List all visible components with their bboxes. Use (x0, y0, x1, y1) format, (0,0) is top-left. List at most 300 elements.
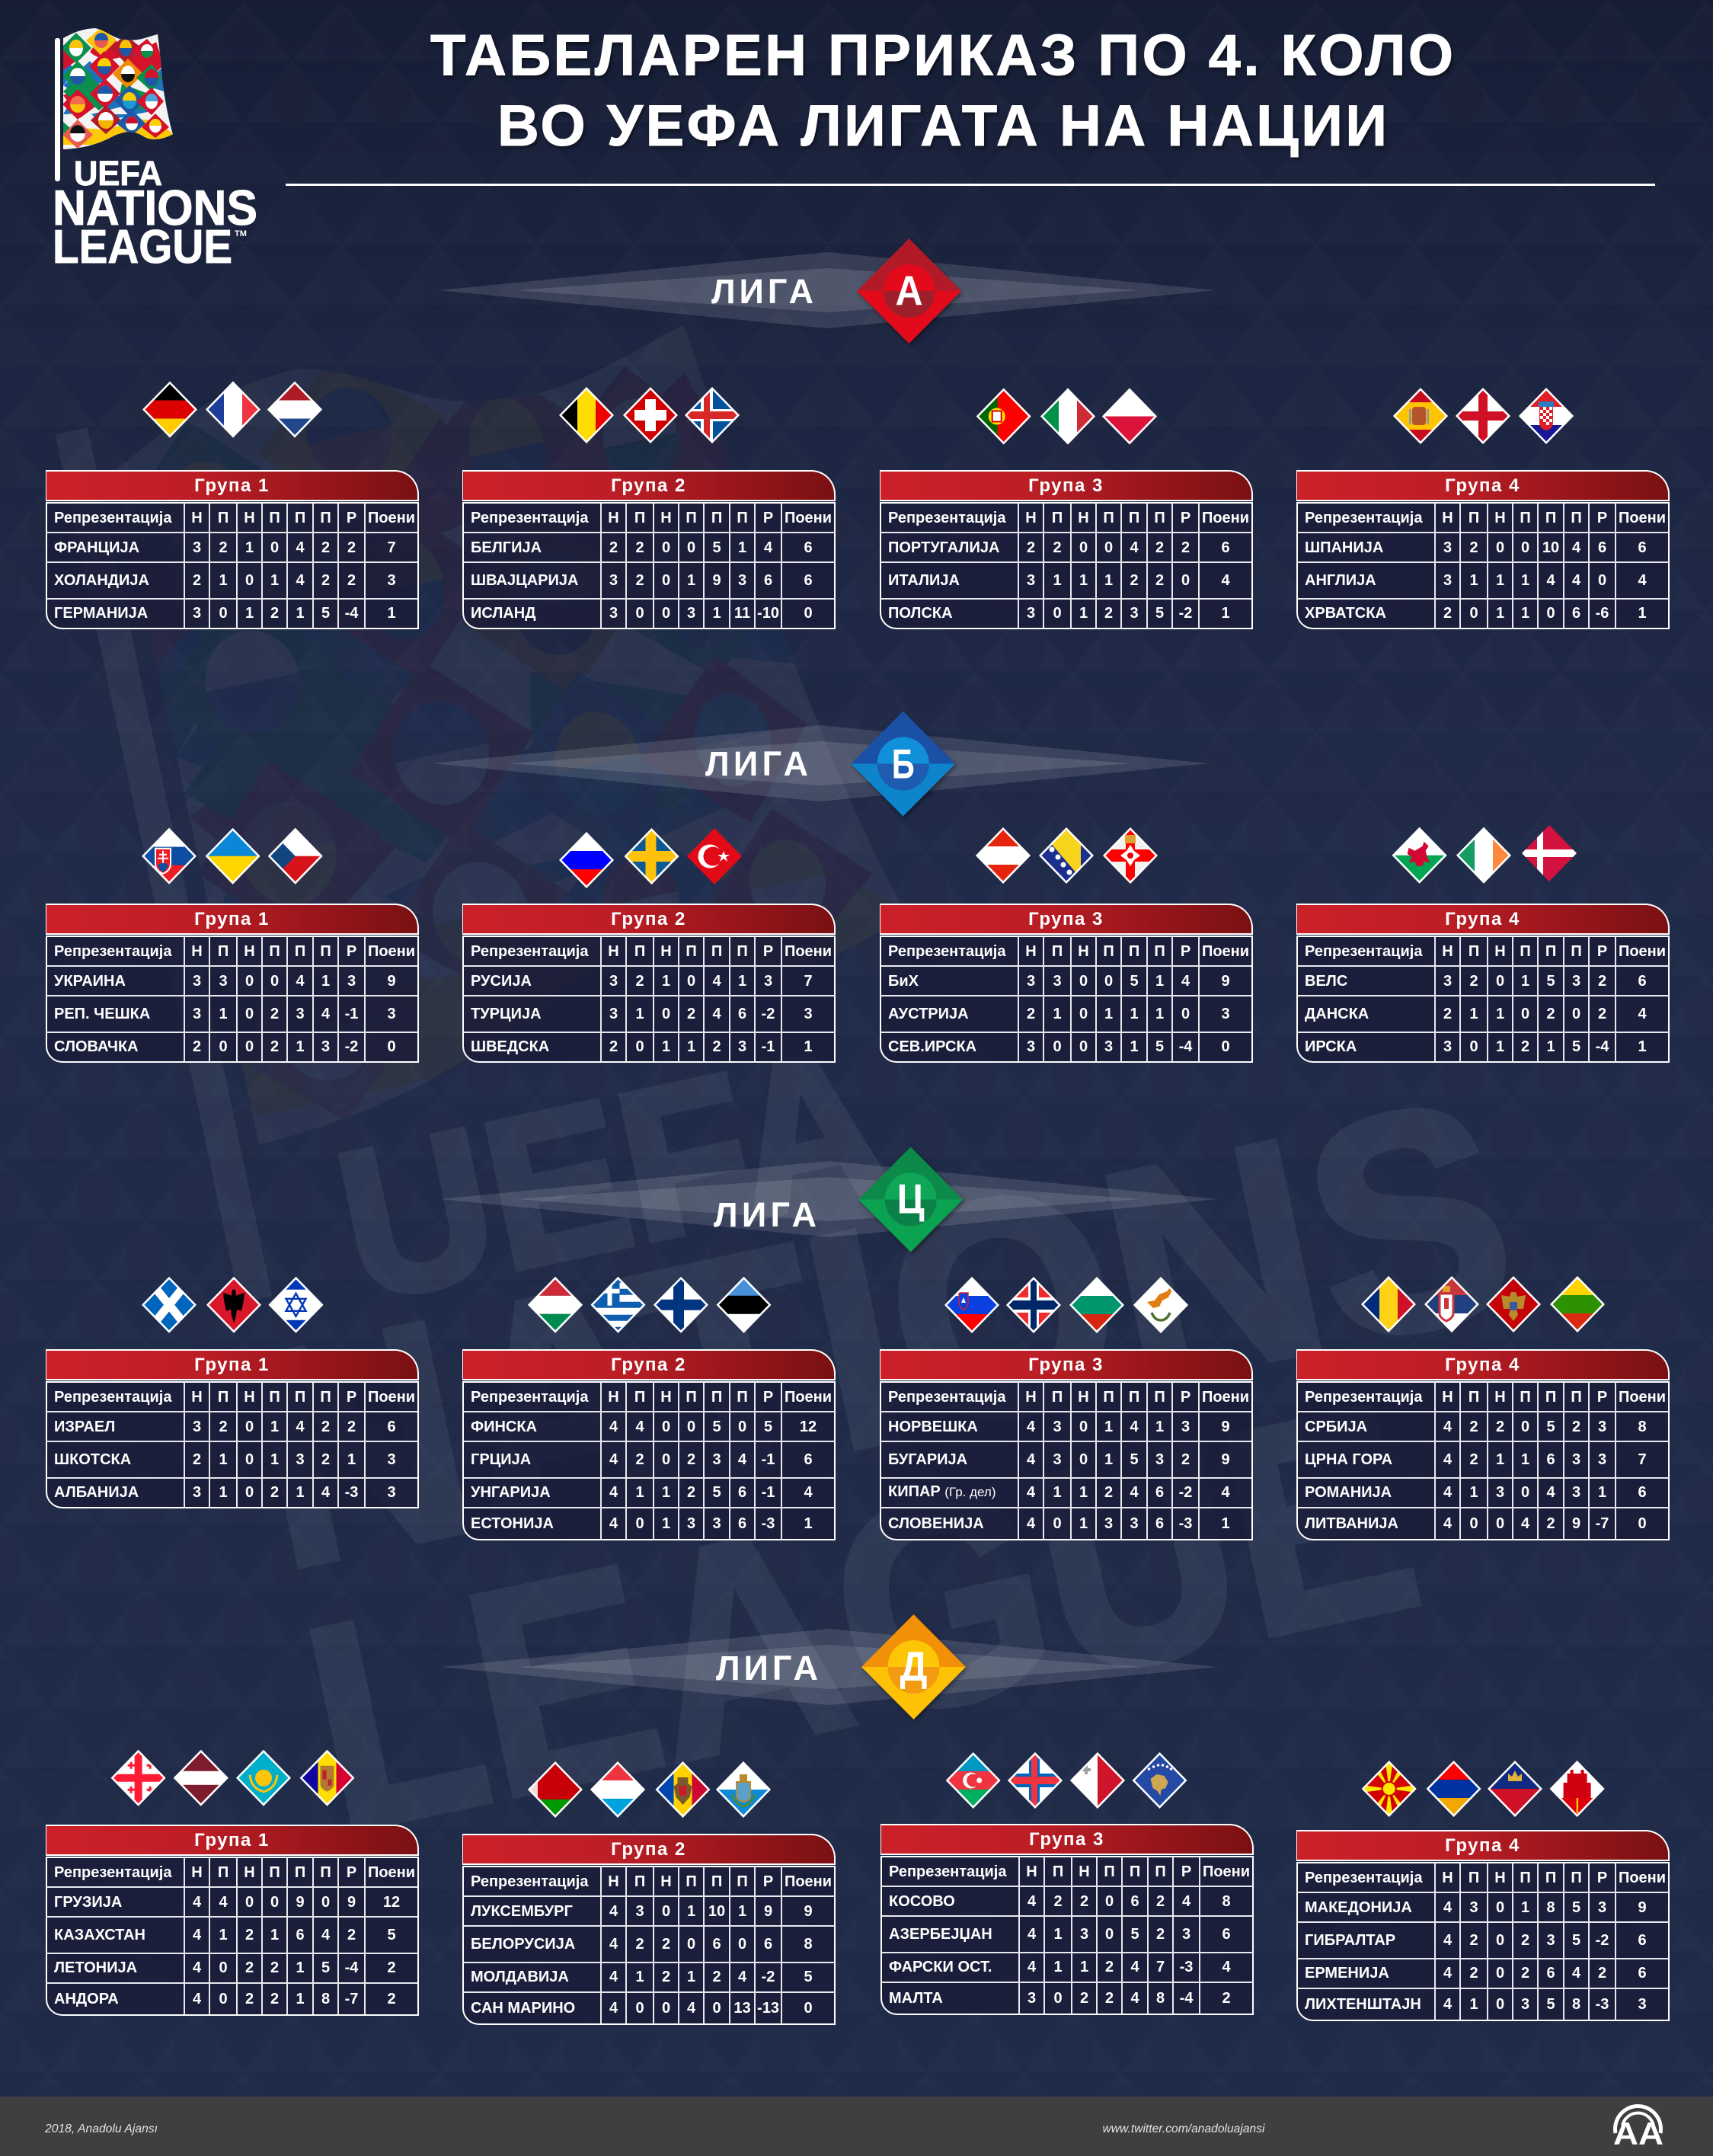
standings table: Поени (785, 943, 832, 960)
standings table: 4 (1130, 539, 1139, 556)
standings table: 0 (635, 2000, 644, 2017)
standings table: ЛУКСЕМБУРГ (471, 1903, 573, 1920)
standings table: 0 (635, 1515, 644, 1532)
group heading: Група 1 (194, 475, 270, 496)
group heading: Група 4 (1445, 1355, 1520, 1375)
standings table: 1 (662, 1484, 670, 1501)
standings table: 2 (1080, 1990, 1088, 2007)
standings table: 0 (1496, 1996, 1504, 2013)
standings table: 2 (1053, 539, 1062, 556)
standings table: 3 (219, 972, 228, 989)
standings table: ШВЕДСКА (471, 1038, 549, 1054)
standings table: 5 (1155, 605, 1164, 622)
standings table: ЦРНА ГОРА (1305, 1451, 1392, 1468)
standings table: 0 (1496, 1515, 1504, 1532)
standings table: Р (347, 1388, 356, 1405)
standings table: -4 (1179, 1038, 1192, 1054)
standings table (462, 936, 836, 1063)
standings table: 1 (270, 1927, 279, 1943)
standings table: 4 (1443, 1996, 1452, 2013)
standings table: 3 (387, 572, 396, 589)
flag: Romania (1361, 1276, 1416, 1332)
standings table: 4 (738, 1451, 746, 1468)
panel: league A group 3 (880, 470, 1253, 629)
group heading: Група 2 (611, 1355, 686, 1375)
standings table: Р (1597, 509, 1607, 526)
group heading: Група 2 (611, 909, 686, 929)
standings table: 1 (347, 1451, 356, 1468)
standings table: Н (244, 1388, 255, 1405)
standings table: 1 (1598, 1484, 1606, 1501)
standings table: ЕРМЕНИЈА (1305, 1964, 1389, 1981)
standings table: Н (1442, 943, 1453, 960)
standings table: П (634, 1388, 645, 1405)
standings table: 0 (270, 1894, 279, 1911)
standings table: 2 (387, 1991, 396, 2007)
standings table: 8 (1222, 1892, 1231, 1909)
title (430, 23, 1453, 158)
standings table: П (1520, 1870, 1531, 1886)
standings table: 4 (1130, 1484, 1139, 1501)
standings table: -1 (345, 1006, 358, 1022)
standings table: КИПАР (Гр. дел) (888, 1483, 996, 1500)
flag: Iceland (685, 387, 740, 443)
standings table: 2 (1443, 605, 1452, 622)
standings table: П (711, 1388, 722, 1405)
standings table: П (1053, 1863, 1063, 1880)
standings table: 1 (1496, 1038, 1504, 1054)
standings table: 2 (1443, 1006, 1452, 1022)
standings table (46, 502, 419, 629)
standings table: П (320, 1388, 331, 1405)
standings table: Поени (368, 1863, 415, 1880)
standings table: 4 (712, 972, 721, 989)
standings table: П (1154, 509, 1165, 526)
standings table: 0 (245, 1038, 254, 1054)
standings table: Н (244, 1863, 255, 1880)
standings table: 6 (1638, 1484, 1647, 1501)
standings table: 2 (1156, 1926, 1165, 1943)
standings table: 2 (635, 572, 644, 589)
standings table: 2 (1155, 539, 1164, 556)
standings table: Репрезентација (1305, 943, 1422, 960)
flag: Gibraltar (1550, 1761, 1605, 1817)
standings table (1296, 1381, 1670, 1540)
standings table: 3 (193, 1484, 201, 1501)
standings table: 4 (1443, 1898, 1452, 1915)
group heading: Група 4 (1445, 1835, 1520, 1856)
standings table: 4 (609, 2000, 618, 2017)
standings table: Р (347, 509, 356, 526)
standings table: 9 (1572, 1515, 1580, 1532)
standings table: 11 (734, 605, 750, 622)
flag: Switzerland (623, 387, 678, 443)
standings table: 9 (1221, 1419, 1230, 1435)
standings table: 0 (687, 972, 695, 989)
standings table: САН МАРИНО (471, 2000, 575, 2017)
standings table: 4 (1027, 1926, 1036, 1943)
standings table: 0 (1521, 1484, 1529, 1501)
flag: England (1456, 388, 1510, 444)
standings table: Поени (1619, 1870, 1666, 1886)
standings table: 1 (1079, 605, 1088, 622)
standings table: 1 (1521, 1451, 1529, 1468)
standings table: 0 (1496, 972, 1504, 989)
flag: Bulgaria (1069, 1277, 1124, 1333)
standings table: Н (1494, 943, 1506, 960)
standings table: 0 (245, 972, 254, 989)
standings table: 3 (387, 1451, 396, 1468)
standings table: 4 (321, 1484, 330, 1501)
standings table: 3 (1027, 1990, 1036, 2007)
standings table: БЕЛОРУСИЈА (471, 1936, 575, 1953)
standings table: Н (1026, 1863, 1037, 1880)
standings table: ШКОТСКА (54, 1451, 131, 1468)
standings table: 3 (1053, 1451, 1062, 1468)
standings table: Репрезентација (1305, 1870, 1422, 1886)
standings table: Поени (1619, 509, 1666, 526)
standings table: 9 (347, 1894, 356, 1911)
flag: France (206, 381, 260, 437)
standings table: 4 (609, 1484, 618, 1501)
flag: Moldova (655, 1761, 710, 1818)
group heading: Група 1 (194, 1355, 270, 1375)
standings table: 1 (687, 1903, 695, 1920)
standings table: Н (660, 1388, 672, 1405)
standings table: 4 (296, 539, 305, 556)
flag: Albania (206, 1277, 261, 1333)
standings table: 2 (1546, 1515, 1555, 1532)
standings table: 2 (687, 1006, 695, 1022)
group heading (462, 470, 836, 501)
standings table: 4 (1443, 1451, 1452, 1468)
standings table: Репрезентација (1305, 509, 1422, 526)
flag: Liechtenstein (1488, 1761, 1542, 1817)
standings table: 4 (193, 1959, 201, 1976)
standings table: 2 (321, 1419, 330, 1435)
standings table: П (1571, 943, 1582, 960)
standings table: 5 (1572, 1932, 1580, 1949)
standings table: 6 (1546, 1964, 1555, 1981)
standings table: 3 (387, 1006, 396, 1022)
standings table: 1 (296, 1959, 305, 1976)
standings table: 8 (1572, 1996, 1580, 2013)
standings table: 2 (347, 572, 356, 589)
standings table: 0 (1079, 1006, 1088, 1022)
standings table: 2 (347, 1927, 356, 1943)
flag: Germany (142, 381, 197, 437)
standings table: 2 (321, 539, 330, 556)
standings table: П (218, 509, 229, 526)
standings table: БиХ (888, 972, 919, 989)
standings table: 0 (635, 605, 644, 622)
standings table: Н (244, 509, 255, 526)
standings table: 5 (1130, 972, 1139, 989)
standings table: 2 (270, 1959, 279, 1976)
group heading (1296, 904, 1670, 935)
standings table: 2 (270, 1006, 279, 1022)
group heading: Група 2 (611, 475, 686, 496)
standings table: 3 (609, 605, 618, 622)
footer link: www.twitter.com/anadoluajansi (1103, 2122, 1265, 2135)
standings table: ШПАНИЈА (1305, 539, 1383, 556)
group heading: Група 1 (194, 1830, 270, 1851)
standings table: 3 (1598, 1451, 1606, 1468)
standings table: МАЛТА (889, 1990, 943, 2007)
standings table: 12 (383, 1894, 400, 1911)
standings table: 2 (662, 1936, 670, 1953)
standings table: 8 (1546, 1898, 1555, 1915)
standings table: 3 (1130, 1515, 1139, 1532)
standings table: 3 (609, 972, 618, 989)
standings table: 1 (1521, 1898, 1529, 1915)
panel: league D group 4 (1296, 1830, 1670, 2021)
standings table: Р (1597, 943, 1607, 960)
standings table: 2 (1027, 1006, 1035, 1022)
standings table: 9 (1221, 972, 1230, 989)
standings table: -1 (762, 1484, 775, 1501)
standings table: П (686, 1388, 697, 1405)
standings table: ЛИТВАНИЈА (1305, 1515, 1398, 1532)
standings table: 2 (712, 1038, 721, 1054)
standings table: 0 (1104, 539, 1113, 556)
panel: league B group 2 (462, 904, 836, 1063)
standings table: П (1545, 943, 1556, 960)
standings table: УНГАРИЈА (471, 1484, 551, 1501)
standings table: 2 (1027, 539, 1035, 556)
standings table: 1 (712, 605, 721, 622)
flag: Belarus (528, 1761, 583, 1818)
standings table: 0 (1521, 1006, 1529, 1022)
standings table: П (737, 509, 748, 526)
standings table: 2 (1521, 1932, 1529, 1949)
standings table: Р (347, 943, 356, 960)
standings table: 0 (1104, 972, 1113, 989)
standings table: 6 (1155, 1484, 1164, 1501)
standings table: -3 (1180, 1958, 1193, 1975)
standings table: 0 (662, 1451, 670, 1468)
standings table: 4 (1572, 572, 1580, 589)
standings table: ЕСТОНИЈА (471, 1515, 554, 1532)
standings table: Репрезентација (889, 1863, 1006, 1880)
standings table: 2 (1181, 1451, 1190, 1468)
standings table: 4 (1443, 1515, 1452, 1532)
standings table: 2 (270, 1484, 279, 1501)
standings table: -1 (762, 1038, 775, 1054)
standings table: 4 (609, 1969, 618, 1985)
standings table: 0 (245, 1451, 254, 1468)
standings table: 0 (687, 1419, 695, 1435)
standings table: ДАНСКА (1305, 1006, 1369, 1022)
standings table: П (1130, 1863, 1140, 1880)
standings table: 3 (1638, 1996, 1647, 2013)
standings table: ФИНСКА (471, 1419, 537, 1435)
standings table: 0 (1521, 539, 1529, 556)
standings table: 1 (1521, 972, 1529, 989)
flag: Netherlands (267, 381, 322, 437)
standings table: 0 (245, 1419, 254, 1435)
standings table: 2 (1105, 1990, 1114, 2007)
group heading: Група 2 (611, 1839, 686, 1860)
standings table: 3 (1521, 1996, 1529, 2013)
panel: league A group 1 (46, 470, 419, 629)
standings table: 6 (738, 1006, 746, 1022)
standings table: 5 (321, 1959, 330, 1976)
standings table: УКРАИНА (54, 972, 126, 989)
standings table: Н (1025, 943, 1037, 960)
standings table: Н (1442, 509, 1453, 526)
panel: league C group 3 (880, 1349, 1253, 1540)
standings table: 2 (193, 572, 201, 589)
standings table: 0 (1079, 1451, 1088, 1468)
standings table: 0 (270, 539, 279, 556)
flag: Azerbaijan (946, 1752, 1001, 1809)
standings table: П (295, 509, 305, 526)
standings table: 3 (738, 572, 746, 589)
standings table: 0 (1221, 1038, 1230, 1054)
standings table: МАКЕДОНИЈА (1305, 1898, 1412, 1915)
group heading (1296, 470, 1670, 501)
standings table: П (1469, 1870, 1479, 1886)
standings table: 4 (1443, 1932, 1452, 1949)
standings table: -3 (345, 1484, 358, 1501)
standings table: П (218, 1863, 229, 1880)
flag: Bosnia and Herzegovina (1037, 827, 1094, 884)
standings table: П (634, 943, 645, 960)
standings table: П (295, 943, 305, 960)
standings table: 3 (1104, 1515, 1113, 1532)
standings table: 0 (1496, 1964, 1504, 1981)
standings table: 4 (1546, 572, 1555, 589)
standings table: Поени (1203, 1863, 1250, 1880)
panel: league B group 3 (880, 904, 1253, 1063)
standings table: СЛОВАЧКА (54, 1038, 139, 1054)
standings table: ПОЛСКА (888, 605, 953, 622)
standings table: 0 (738, 1936, 746, 1953)
standings table: Репрезентација (1305, 1388, 1422, 1405)
standings table: -2 (1179, 605, 1192, 622)
standings table: 3 (347, 972, 356, 989)
standings table: ПОРТУГАЛИЈА (888, 539, 999, 556)
flag: Northern Ireland (1103, 827, 1158, 884)
group heading: Група 3 (1028, 475, 1104, 496)
standings table: П (320, 943, 331, 960)
standings table: 1 (1053, 572, 1062, 589)
standings table: 4 (1027, 1419, 1035, 1435)
title: ВО УЕФА ЛИГАТА НА НАЦИИ (497, 94, 1387, 158)
standings table: 3 (1053, 972, 1062, 989)
standings table: П (1520, 509, 1531, 526)
standings table: 2 (1130, 572, 1139, 589)
standings table: 2 (219, 1419, 228, 1435)
standings table: 1 (296, 1484, 305, 1501)
standings table: П (1129, 509, 1139, 526)
standings table (462, 1866, 836, 2025)
standings table: 0 (387, 1038, 396, 1054)
standings table: 2 (1080, 1892, 1088, 1909)
standings table: 1 (1104, 1451, 1113, 1468)
standings table: Н (191, 943, 203, 960)
standings table: 4 (609, 1903, 618, 1920)
flag: San Marino (716, 1761, 771, 1818)
standings table: -6 (1596, 605, 1609, 622)
standings table: 2 (387, 1959, 396, 1976)
standings table: Репрезентација (471, 1873, 588, 1889)
standings table: 6 (1130, 1892, 1139, 1909)
standings table: 2 (193, 1038, 201, 1054)
standings table: 4 (1221, 1484, 1230, 1501)
standings table: 3 (1572, 972, 1580, 989)
standings table: -2 (762, 1006, 775, 1022)
standings table: 1 (245, 605, 254, 622)
standings table: 2 (1469, 1964, 1478, 1981)
standings table: Р (1181, 1388, 1190, 1405)
standings table: 0 (219, 1038, 228, 1054)
standings table: П (737, 1388, 748, 1405)
standings table: ГРУЗИЈА (54, 1894, 122, 1911)
standings table: 3 (1080, 1926, 1088, 1943)
panel: league A group 4 (1296, 470, 1670, 629)
standings table: 6 (1222, 1926, 1231, 1943)
standings table: 0 (245, 572, 254, 589)
standings table: 3 (1027, 1038, 1035, 1054)
standings table: 4 (1443, 1419, 1452, 1435)
standings table: Н (660, 509, 672, 526)
flag: Finland (654, 1277, 708, 1333)
standings table: 1 (1104, 1419, 1113, 1435)
standings table: П (218, 1388, 229, 1405)
standings table: 5 (1572, 1898, 1580, 1915)
standings table: Поени (368, 943, 415, 960)
standings table: 1 (270, 1451, 279, 1468)
standings table: 3 (1598, 1419, 1606, 1435)
standings table: 3 (1130, 605, 1139, 622)
standings table: 2 (270, 1991, 279, 2007)
standings table: РЕП. ЧЕШКА (54, 1006, 150, 1022)
standings table: 6 (804, 1451, 813, 1468)
standings table: 7 (387, 539, 396, 556)
standings table: 8 (321, 1991, 330, 2007)
watermark: UEFA Nations League logo (31, 127, 1593, 1894)
standings table: Поени (1619, 943, 1666, 960)
standings table: Н (1025, 509, 1037, 526)
standings table: ИСЛАНД (471, 605, 536, 622)
standings table: 3 (296, 1451, 305, 1468)
standings table: 5 (712, 1419, 721, 1435)
standings table: 4 (764, 539, 772, 556)
standings table: Репрезентација (888, 943, 1005, 960)
standings table: 4 (738, 1969, 746, 1985)
standings table: 9 (387, 972, 396, 989)
standings table: 3 (321, 1038, 330, 1054)
standings table: 2 (347, 539, 356, 556)
standings table: 2 (270, 605, 279, 622)
standings table: Репрезентација (471, 943, 588, 960)
standings table: 0 (804, 2000, 813, 2017)
standings table: -7 (1596, 1515, 1609, 1532)
standings table: 4 (296, 972, 305, 989)
standings table: 6 (1546, 1451, 1555, 1468)
standings table: 3 (804, 1006, 813, 1022)
standings table: 4 (1027, 1451, 1035, 1468)
standings table: 6 (804, 572, 813, 589)
standings table: 2 (270, 1038, 279, 1054)
flag: Latvia (174, 1750, 229, 1806)
standings table: 6 (764, 572, 772, 589)
flag: Italy (1040, 389, 1095, 445)
standings table: 9 (804, 1903, 813, 1920)
standings table: 4 (193, 1991, 201, 2007)
